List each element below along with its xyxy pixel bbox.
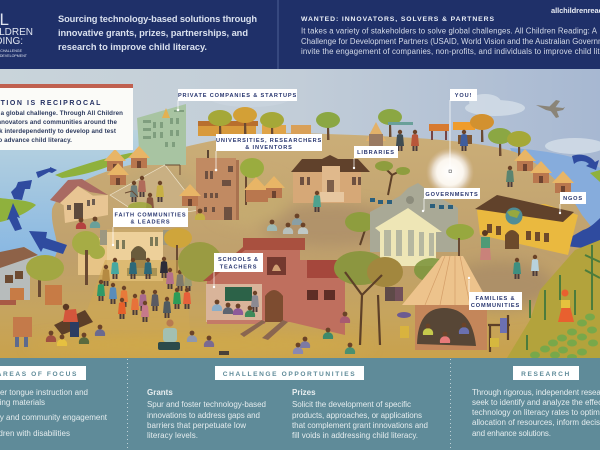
arrows: right blue <box>557 155 600 248</box>
children reading outside <box>293 287 411 354</box>
prizes: fill voids in addressing child literacy. <box>292 431 418 440</box>
small tree and huts beside university <box>179 158 285 206</box>
section: research <box>472 366 600 438</box>
prizes <box>292 388 428 440</box>
label: governments <box>422 188 480 212</box>
label: libraries: LIBRARIES <box>357 150 395 156</box>
building: faith church <box>78 229 190 281</box>
grants: Grants <box>147 388 173 397</box>
label: schools and teachers: TEACHERS <box>220 264 257 270</box>
wanted body: It takes a variety of stakeholders to solve global challenges. All Children Reading: A <box>301 26 598 36</box>
label: ngos: NGOS <box>563 196 583 202</box>
label: you: YOU! <box>455 93 472 99</box>
label: governments: GOVERNMENTS <box>425 192 479 198</box>
section: research: and enhance solutions. <box>472 429 551 438</box>
house: tan left house <box>50 179 108 229</box>
label: libraries <box>353 146 398 169</box>
land shading <box>30 172 555 357</box>
tagline <box>58 14 257 52</box>
label: universities <box>215 134 322 171</box>
building: library <box>291 155 370 212</box>
prizes: Prizes <box>292 388 316 397</box>
label: families and communities <box>468 277 522 310</box>
label: faith communities <box>112 208 188 246</box>
wanted body <box>301 26 600 56</box>
trees by government <box>345 161 410 245</box>
left sea <box>0 130 150 262</box>
seated man with children <box>158 319 310 355</box>
people near NGO <box>480 230 539 279</box>
green field <box>507 240 600 360</box>
grants: literacy levels. <box>147 431 198 440</box>
section: challenge opportunities <box>147 366 428 440</box>
playground with children <box>110 165 200 218</box>
children reading in middle ground <box>267 214 308 234</box>
prizes: that complement grant innovations and <box>292 421 428 430</box>
building: brown university tower <box>195 150 239 220</box>
label: you <box>449 89 477 172</box>
glow: sun spot <box>426 148 474 196</box>
grants: Spur and foster technology-based <box>147 400 266 409</box>
section: areas of focus <box>0 366 108 438</box>
small huts north-east <box>506 149 574 193</box>
prizes: products, approaches, or applications <box>292 411 422 420</box>
illustrated scene <box>0 69 600 360</box>
crowd of worshippers <box>80 257 192 330</box>
banner: header <box>0 0 600 69</box>
section: research: RESEARCH <box>521 371 571 378</box>
wanted heading: WANTED: INNOVATORS, SOLVERS & PARTNERS <box>301 16 494 23</box>
children in school <box>212 291 259 317</box>
building: NGO yellow <box>475 195 578 255</box>
icon: airplane <box>536 100 565 118</box>
grants <box>147 388 266 440</box>
prizes: Solicit the development of specific <box>292 400 411 409</box>
building: government with temple front <box>370 183 474 266</box>
label: schools and teachers: SCHOOLS & <box>218 257 259 263</box>
label: families and communities: FAMILIES & <box>476 296 515 302</box>
land mass <box>0 133 600 358</box>
callout: innovation is reciprocal <box>0 84 133 150</box>
family hut <box>402 256 510 352</box>
trees by church <box>72 228 192 285</box>
label: families and communities: COMMUNITIES <box>471 303 520 309</box>
clouds <box>210 89 600 154</box>
tree cluster by school <box>334 251 403 345</box>
islands <box>0 152 600 222</box>
building: school <box>178 238 345 340</box>
label: universities: UNIVERSITIES, RESEARCHERS <box>216 138 322 144</box>
label: universities: & INVENTORS <box>245 145 293 151</box>
label: faith communities: FAITH COMMUNITIES <box>115 212 186 218</box>
green office building <box>137 104 186 165</box>
grants: innovations to address gaps and <box>147 411 260 420</box>
label: private companies and startups <box>177 89 297 111</box>
far village buildings and trees <box>104 107 531 185</box>
right sea <box>510 148 600 250</box>
section: challenge opportunities: CHALLENGE OPPORTUNITIES <box>223 371 356 378</box>
label: schools and teachers <box>213 253 263 288</box>
label: faith communities: & LEADERS <box>131 220 170 226</box>
label: ngos <box>559 192 586 214</box>
label: private companies and startups: PRIVATE COMPANIES & STARTUPS <box>178 93 297 99</box>
tagline: innovative grants, prizes, partnerships, and <box>58 28 248 38</box>
teacher on bench with children <box>13 304 105 347</box>
tagline: research to improve child literacy. <box>58 42 207 52</box>
tagline: Sourcing technology-based solutions through <box>58 14 257 24</box>
grants: barriers that perpetuate low <box>147 421 246 430</box>
panel: bottom band <box>0 358 600 450</box>
logo <box>0 10 33 58</box>
house: grey bottom left <box>0 247 64 305</box>
arrows: left blue <box>7 167 67 254</box>
